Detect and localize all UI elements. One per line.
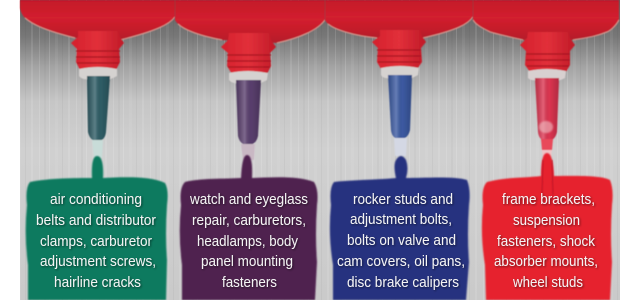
bottle 4: red threadlocker bbox=[473, 0, 619, 158]
red panel text: frame brackets, bbox=[502, 191, 595, 208]
bottle 1: green threadlocker bbox=[20, 0, 175, 158]
blue panel text: cam covers, oil pans, bbox=[337, 253, 465, 270]
blue panel text: disc brake calipers bbox=[347, 274, 459, 291]
blue panel text: bolts on valve and bbox=[347, 232, 456, 249]
red panel text: absorber mounts, bbox=[494, 253, 598, 270]
purple panel text: repair, carburetors, bbox=[192, 212, 306, 229]
purple panel text: watch and eyeglass bbox=[189, 191, 308, 208]
purple panel text bbox=[189, 191, 308, 291]
panel: green applications bbox=[26, 156, 168, 300]
red panel text: fasteners, shock bbox=[497, 233, 595, 250]
green panel text: air conditioning bbox=[50, 191, 142, 208]
purple panel text: panel mounting bbox=[201, 253, 293, 270]
panel: red applications bbox=[482, 153, 613, 300]
red panel text: suspension bbox=[513, 212, 580, 229]
bottle 2: purple threadlocker bbox=[175, 0, 325, 160]
green panel text: belts and distributor bbox=[36, 212, 156, 229]
panel: purple applications bbox=[180, 155, 318, 300]
green panel text: adjustment screws, bbox=[40, 253, 156, 270]
purple panel text: fasteners bbox=[222, 274, 277, 291]
red panel text: wheel studs bbox=[512, 274, 583, 291]
blue panel text: adjustment bolts, bbox=[350, 211, 452, 228]
green panel text: clamps, carburetor bbox=[40, 233, 152, 250]
panel: blue applications bbox=[330, 156, 470, 300]
bottle 3: blue threadlocker bbox=[325, 0, 473, 156]
blue panel text bbox=[337, 191, 465, 291]
blue panel text: rocker studs and bbox=[353, 191, 453, 208]
red panel text bbox=[494, 191, 598, 291]
purple panel text: headlamps, body bbox=[197, 233, 298, 250]
green panel text bbox=[36, 191, 156, 291]
green panel text: hairline cracks bbox=[54, 274, 141, 291]
